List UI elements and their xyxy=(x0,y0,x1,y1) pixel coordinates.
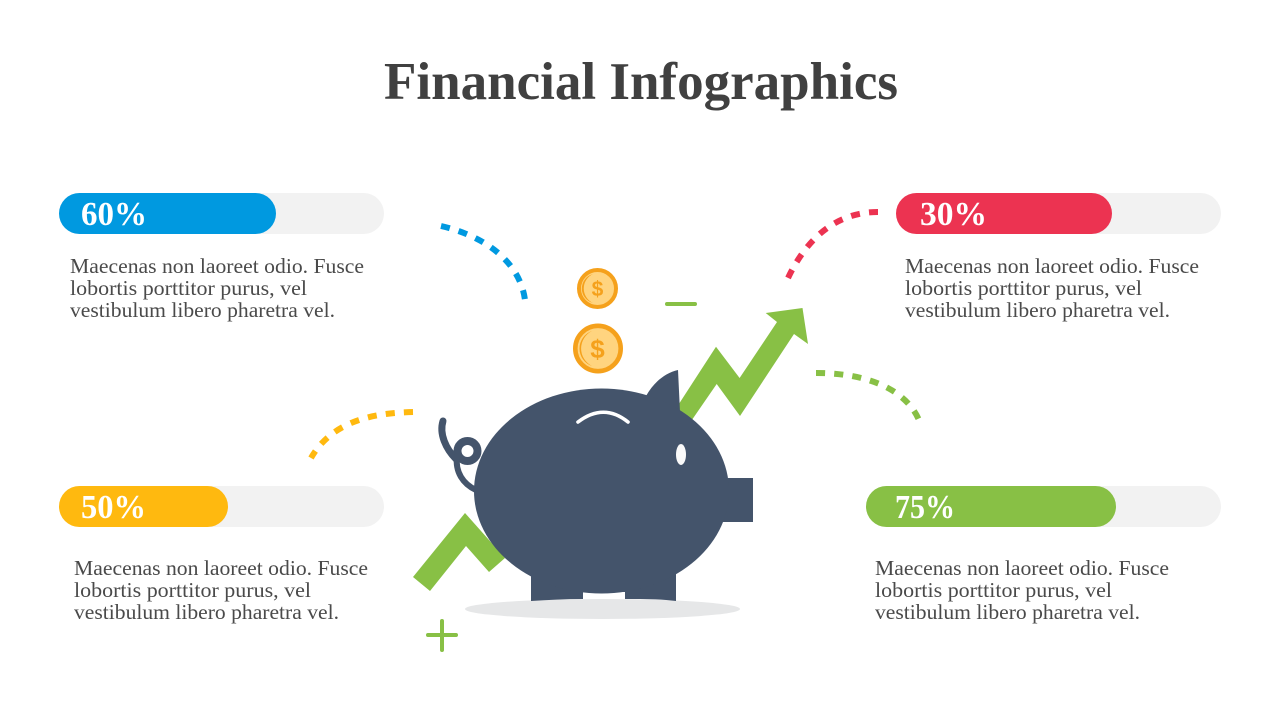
panel: 75% green xyxy=(866,486,1221,624)
pig ear xyxy=(646,370,680,412)
pig snout xyxy=(710,478,753,522)
icon: small coin: $ xyxy=(592,278,604,301)
text block: 60% description xyxy=(70,254,364,322)
coin slot xyxy=(578,412,628,422)
pig body xyxy=(474,388,729,594)
text block: 75% description: vestibulum libero pharetra vel. xyxy=(875,600,1140,624)
progress bar: 75%: 75% xyxy=(895,489,955,526)
text block: 30% description: vestibulum libero pharetra vel. xyxy=(905,298,1170,322)
pig legs xyxy=(531,560,676,601)
icon: shadow under pig xyxy=(465,599,740,619)
text block: 75% description xyxy=(875,556,1169,624)
text block: 30% description: lobortis porttitor purus, vel xyxy=(905,276,1142,300)
panel: 60% blue xyxy=(59,193,384,322)
arrow: yellow dashed arc xyxy=(311,412,413,458)
progress bar: 30%: 30% xyxy=(920,196,987,233)
icon: large coin: $ xyxy=(590,334,605,364)
icon: large coin xyxy=(575,326,621,371)
progress bar: 60%: 60% xyxy=(81,196,147,233)
progress bar: 30% xyxy=(896,193,1221,234)
text block: 60% description: vestibulum libero pharetra vel. xyxy=(70,298,335,322)
text block: 50% description: lobortis porttitor purus, vel xyxy=(74,578,311,602)
text block: 60% description: Maecenas non laoreet odio. Fusce xyxy=(70,254,364,278)
progress bar: 50%: 50% xyxy=(81,489,146,526)
text block: 30% description: Maecenas non laoreet odio. Fusce xyxy=(905,254,1199,278)
text block: 30% description xyxy=(905,254,1199,322)
text block: 60% description: lobortis porttitor purus, vel xyxy=(70,276,307,300)
icon: piggy bank xyxy=(442,370,753,601)
title: Financial Infographics xyxy=(384,53,898,111)
text block: 50% description xyxy=(74,556,368,624)
arrow: green lower trend xyxy=(413,513,505,591)
text block: 75% description: lobortis porttitor purus, vel xyxy=(875,578,1112,602)
progress bar: 75% xyxy=(866,486,1221,527)
arrow: green rising trend xyxy=(675,308,808,430)
progress bar: 60% xyxy=(59,193,384,234)
arrow: red dashed arc xyxy=(788,212,878,278)
progress bar: 50% xyxy=(59,486,384,527)
text block: 50% description: Maecenas non laoreet odio. Fusce xyxy=(74,556,368,580)
icon: green plus xyxy=(428,621,456,650)
arrow: blue dashed arc xyxy=(441,226,525,300)
pig eye xyxy=(676,444,686,465)
arrow: green dashed arc xyxy=(816,373,919,420)
icon: small coin xyxy=(579,270,616,307)
pig tail xyxy=(442,421,478,490)
text block: 50% description: vestibulum libero pharetra vel. xyxy=(74,600,339,624)
panel: 30% red xyxy=(896,193,1221,322)
panel: 50% yellow xyxy=(59,486,384,624)
text block: 75% description: Maecenas non laoreet odio. Fusce xyxy=(875,556,1169,580)
icon: green minus xyxy=(667,302,695,306)
